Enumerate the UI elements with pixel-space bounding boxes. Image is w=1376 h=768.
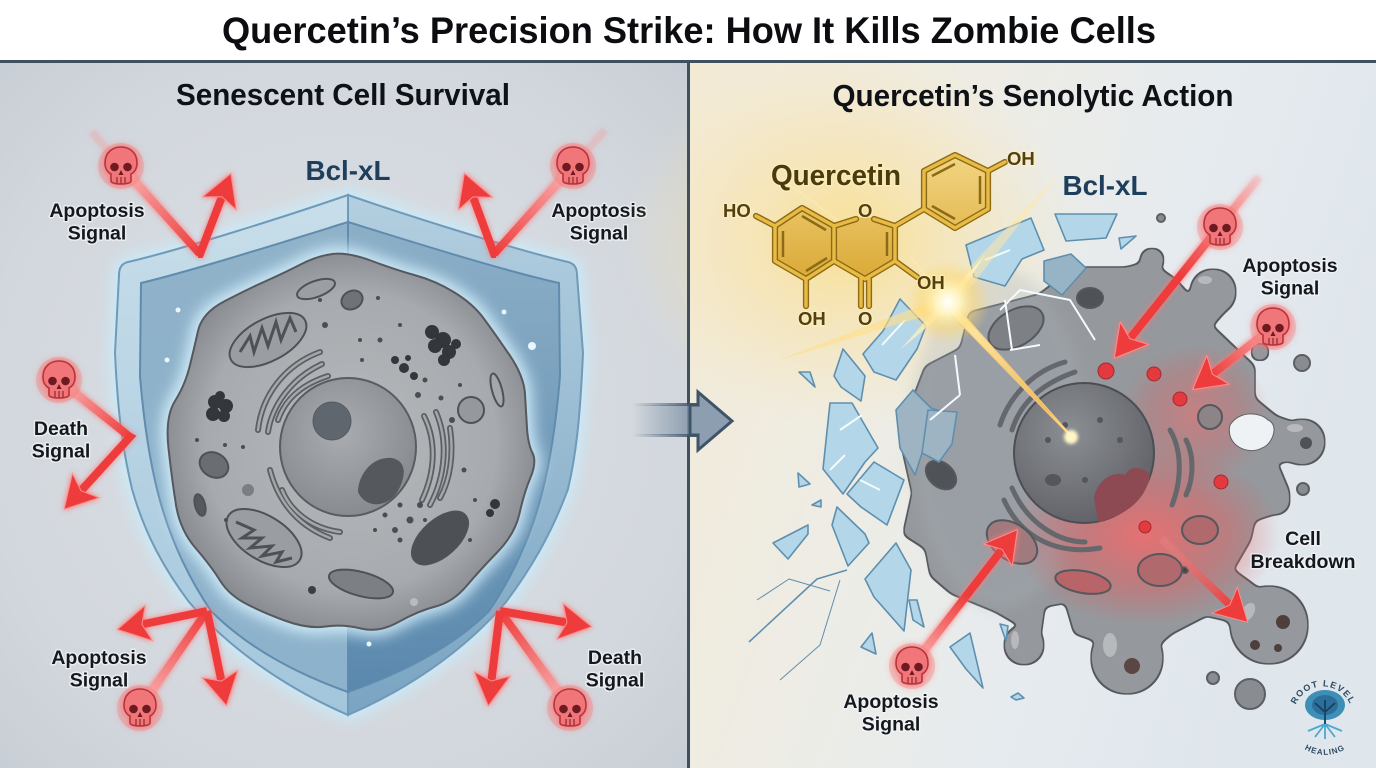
divider [687,63,690,768]
icon: skull [36,357,82,403]
label: cell breakdown: Cell [1285,528,1321,550]
arrow group: left death signal [36,357,130,493]
label: cell breakdown: Breakdown [1250,551,1356,573]
mitochondria [192,275,506,604]
arrow group: lower apoptosis signal [889,547,1004,689]
label: death signal bottom-right: Signal [586,670,644,692]
panel: senescent cell survival [0,62,688,768]
arrow: cell breakdown [1162,539,1232,607]
icon: skull [1250,304,1296,350]
label: OH top: OH [1007,148,1035,169]
logo: root level healing [1290,680,1354,755]
logo: root level healing: ROOT LEVEL [1290,680,1354,704]
panel: quercetin senolytic action [632,63,1376,768]
icon: skull [889,643,935,689]
label: apoptosis signal top-right: Apoptosis [551,200,647,222]
icon: skull [550,143,596,189]
label: quercetin: Quercetin [771,160,901,192]
label: apoptosis signal top-left: Apoptosis [49,200,145,222]
hole [1229,414,1274,451]
arrow group: upper apoptosis signal [1128,177,1259,341]
icon: skull [547,685,593,731]
nucleus [280,378,416,516]
label: OH bottom: OH [798,308,826,329]
arrow group: bottom-left apoptosis signal [117,611,222,731]
top rule [0,60,1376,63]
label: O bottom: O [858,308,872,329]
heading: senescent cell survival: Senescent Cell Survival [176,77,510,112]
label: apoptosis signal top-left: Signal [68,222,126,244]
shield shards [749,214,1136,700]
arrow group: right apoptosis signal [1210,304,1296,376]
label: HO left: HO [723,200,751,221]
arrow: transition between panels [632,392,732,450]
cell: senescent cell [168,254,534,630]
label: apoptosis signal bottom: Apoptosis [843,691,939,713]
label: apoptosis signal upper right: Apoptosis [1242,255,1338,277]
panel: title bar background [0,0,1376,60]
arrow group: top-right apoptosis signal [472,130,605,254]
detached blebs [1157,214,1310,709]
molecule: quercetin structure [723,148,1035,329]
lobe highlights [1011,276,1303,657]
label: death signal bottom-right: Death [588,647,642,669]
dark clumps [206,325,500,517]
label: OH right: OH [917,272,945,293]
heading: quercetin senolytic action: Quercetin’s Senolytic Action [832,78,1234,113]
icon: skull [1197,204,1243,250]
label: Bcl-xL left: Bcl-xL [306,155,390,186]
arrow group: bottom-right death signal [491,611,593,731]
arrow group: top-left apoptosis signal [92,132,223,254]
label: apoptosis signal top-right: Signal [570,222,628,244]
icon: skull [117,685,163,731]
label: apoptosis signal bottom-left: Apoptosis [51,647,147,669]
label: apoptosis signal upper right: Signal [1261,278,1319,300]
logo: root level healing: HEALING [1304,744,1344,755]
endoplasmic reticulum [258,352,452,538]
organelles [920,288,1312,674]
label: O ring: O [858,200,872,221]
cell: ruptured cell [900,214,1324,709]
er membranes [1000,362,1192,550]
nucleus [1014,383,1154,523]
starburst and beam [738,146,1078,444]
icon: skull [98,143,144,189]
label: death signal left: Death [34,418,88,440]
label: apoptosis signal bottom: Signal [862,714,920,736]
label: death signal left: Signal [32,440,90,462]
red dots [1098,363,1228,533]
cell granules [195,296,477,606]
title: Quercetin’s Precision Strike: How It Kills Zombie Cells [222,10,1156,51]
shield: Bcl-xL [115,195,583,715]
label: apoptosis signal bottom-left: Signal [70,670,128,692]
label: Bcl-xL right: Bcl-xL [1062,170,1148,201]
